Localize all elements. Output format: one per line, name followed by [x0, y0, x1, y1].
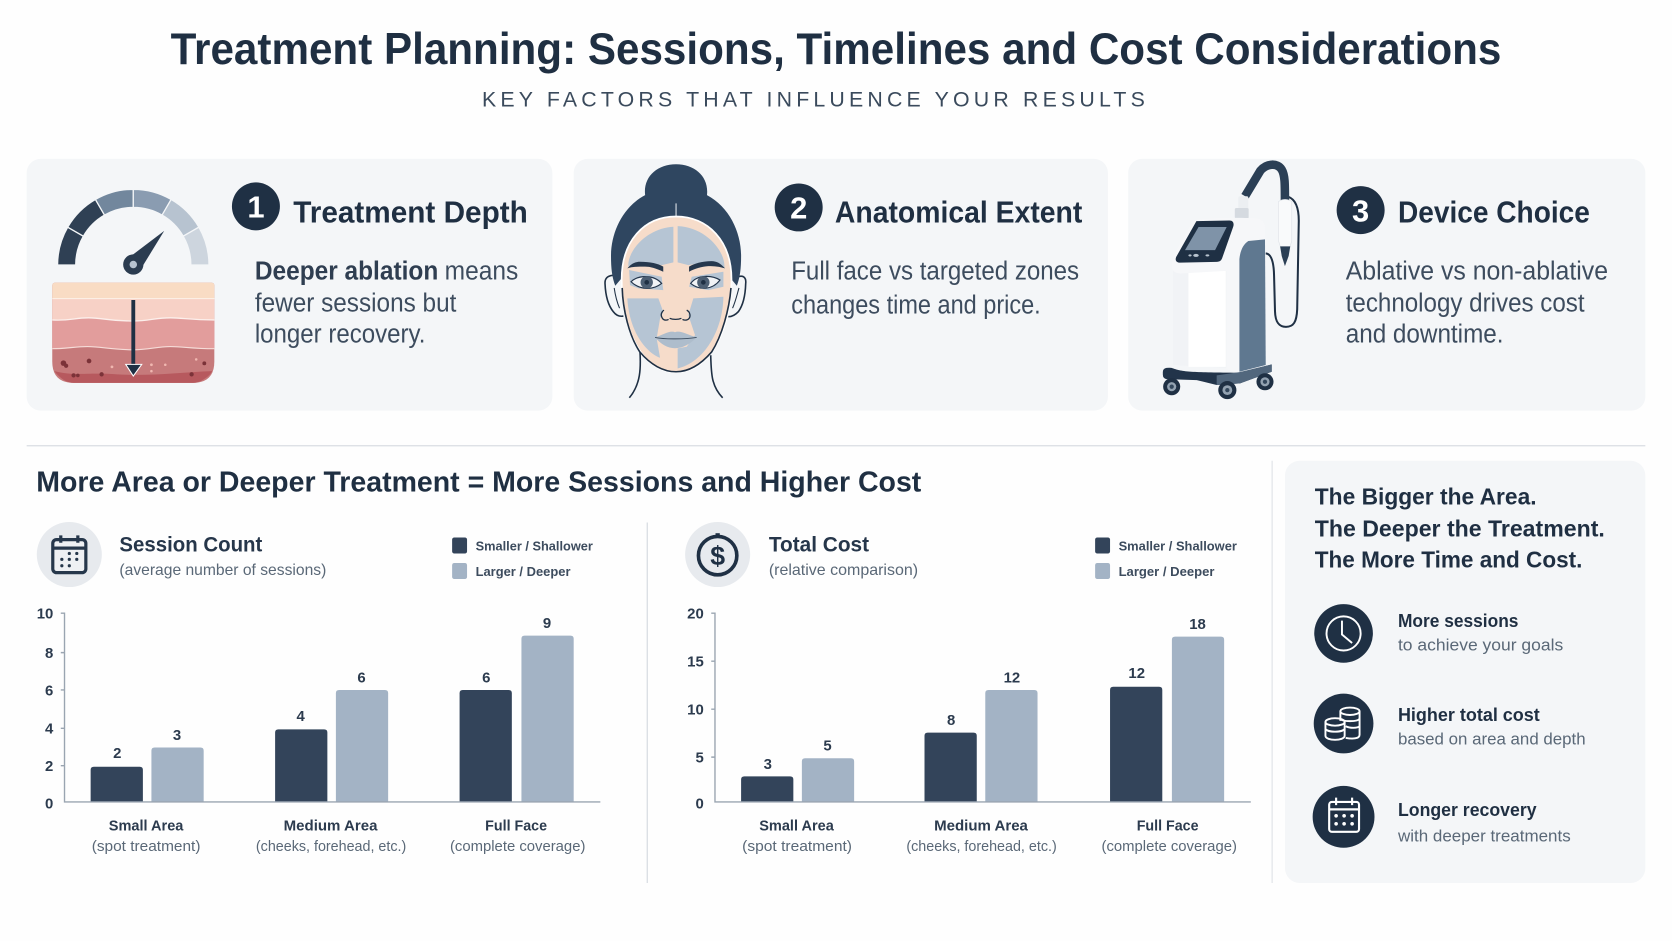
number badge 2 [775, 183, 823, 231]
bar chart: cost: 20 [687, 606, 704, 623]
subtitle: KEY FACTORS THAT INFLUENCE YOUR RESULTS [482, 88, 1150, 112]
bar chart: sessions: 4 [45, 721, 54, 738]
item: longer recovery: with deeper treatments [1397, 826, 1571, 845]
chart panel: total cost [685, 522, 1251, 855]
bar chart: cost: 10 [687, 701, 704, 718]
text: device choice body: and downtime. [1346, 320, 1504, 348]
icon: skin layers [52, 283, 214, 383]
item: higher total cost: Higher total cost [1398, 705, 1540, 725]
heading: treatment depth: Treatment Depth [293, 194, 528, 229]
bar chart: sessions: 2 [113, 745, 121, 762]
bar chart: cost [687, 606, 1251, 855]
number badge 1 [232, 182, 280, 230]
bar chart: cost: 8 [947, 712, 955, 729]
text: anatomical extent body [791, 257, 1079, 320]
chart title: Session Count [119, 532, 262, 556]
bar chart: sessions: 8 [45, 645, 53, 662]
bar chart: sessions: 2 [45, 758, 53, 775]
bar chart: sessions: 3 [173, 727, 181, 744]
bar chart: cost: 15 [687, 653, 704, 670]
chart title: Total Cost [769, 532, 869, 556]
eyes [631, 276, 720, 289]
number badge 3 [1337, 186, 1385, 234]
icon: dollar [685, 522, 750, 587]
heading: device choice: Device Choice [1398, 194, 1590, 229]
text: treatment depth body: fewer sessions but [255, 289, 456, 317]
icon: dollar: $ [710, 541, 725, 571]
bar chart: sessions: (spot treatment) [92, 838, 200, 855]
number badge 3: 3 [1352, 193, 1369, 228]
item: higher total cost [1398, 705, 1586, 748]
bar chart: cost: 5 [823, 738, 832, 755]
bar chart: sessions: 4 [297, 708, 306, 725]
panel: treatment depth [27, 159, 552, 411]
icon: depth gauge [58, 189, 209, 275]
panel: summary [1285, 461, 1645, 883]
bar chart: sessions: 10 [37, 606, 53, 623]
text: device choice body [1346, 257, 1608, 348]
text: device choice body: Ablative vs non-ablative [1346, 257, 1608, 285]
icon: calendar [37, 522, 102, 587]
legend: Smaller / Shallower [476, 538, 593, 553]
bar chart: sessions: 6 [482, 669, 490, 686]
bar chart: cost: Small Area [759, 818, 835, 835]
bar chart: sessions: Small Area [109, 818, 184, 835]
item: more sessions: to achieve your goals [1398, 635, 1563, 654]
section heading: More Area or Deeper Treatment = More Sessions and Higher Cost [36, 467, 922, 499]
bar chart: sessions: 9 [543, 615, 551, 632]
bar chart: sessions: Medium Area [284, 818, 378, 835]
chart subtitle: (relative comparison) [769, 562, 918, 579]
chart panel: session count [37, 522, 600, 855]
icon: recovery calendar [1313, 786, 1374, 848]
legend [452, 537, 593, 579]
text: treatment depth body: longer recovery. [255, 320, 425, 348]
item: longer recovery: Longer recovery [1398, 800, 1537, 820]
chart subtitle: (average number of sessions) [119, 562, 326, 579]
bar chart: sessions: 6 [45, 682, 53, 699]
item: more sessions [1398, 611, 1563, 654]
bar chart: cost: 12 [1004, 669, 1020, 686]
icon: coins [1314, 694, 1373, 753]
summary headline [1315, 483, 1605, 572]
legend: Smaller / Shallower [1119, 538, 1237, 553]
bar chart: sessions: (cheeks, forehead, etc.) [256, 838, 406, 855]
bar chart: sessions: Full Face [485, 818, 547, 835]
bar chart: cost: (spot treatment) [742, 838, 852, 855]
bar chart: cost: (complete coverage) [1102, 838, 1237, 855]
heading: anatomical extent: Anatomical Extent [835, 194, 1082, 229]
legend [1095, 537, 1237, 579]
bar chart: sessions: 6 [357, 669, 366, 686]
bar chart: cost: 5 [695, 749, 704, 766]
legend: Larger / Deeper [476, 564, 570, 579]
title: Treatment Planning: Sessions, Timelines and Cost Considerations [171, 24, 1501, 74]
text: anatomical extent body: changes time and price. [791, 292, 1041, 320]
bar chart: cost: Medium Area [934, 818, 1029, 835]
legend: Larger / Deeper [1119, 564, 1215, 579]
bar chart: sessions: (complete coverage) [450, 838, 585, 855]
bar chart: cost: (cheeks, forehead, etc.) [906, 838, 1057, 855]
summary headline: The Bigger the Area. [1315, 483, 1537, 509]
icon: clock [1314, 604, 1373, 663]
icon: laser device [1163, 165, 1299, 399]
panel: anatomical extent [574, 159, 1108, 411]
bar chart: cost: 18 [1189, 616, 1206, 633]
summary headline: The Deeper the Treatment. [1315, 515, 1605, 541]
icon: face map [605, 164, 746, 398]
number badge 1: 1 [247, 190, 265, 225]
item: higher total cost: based on area and depth [1398, 729, 1586, 748]
item: longer recovery [1397, 800, 1571, 845]
bar chart: cost: 3 [764, 756, 772, 773]
text: treatment depth body: Deeper ablation [255, 257, 438, 285]
text: treatment depth body [255, 257, 518, 348]
text: device choice body: technology drives cost [1346, 289, 1585, 317]
bar chart: cost: Full Face [1137, 818, 1199, 835]
summary headline: The More Time and Cost. [1315, 546, 1582, 572]
text: anatomical extent body: Full face vs targeted zones [791, 257, 1079, 285]
bar chart: cost: 0 [695, 795, 704, 812]
bar chart: sessions: 0 [45, 795, 53, 812]
text: treatment depth body: means [445, 257, 518, 285]
bar chart: sessions [37, 606, 600, 855]
bar chart: cost: 12 [1128, 665, 1145, 682]
item: more sessions: More sessions [1398, 611, 1518, 631]
panel: device choice [1128, 159, 1645, 411]
number badge 2: 2 [790, 191, 807, 226]
